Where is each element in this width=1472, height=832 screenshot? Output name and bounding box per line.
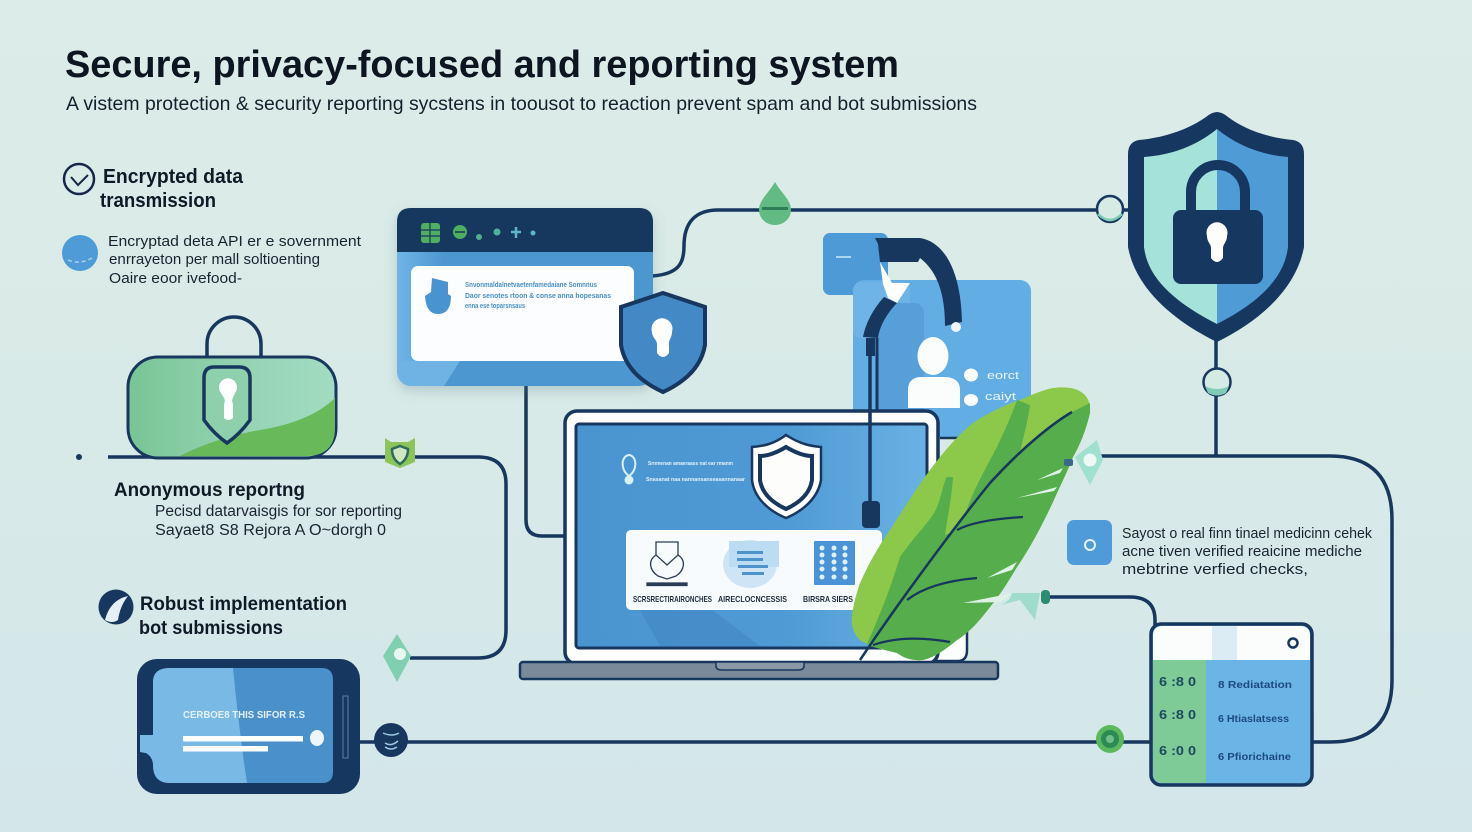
phone screen [140, 668, 333, 783]
panel: anonymous reporting [114, 479, 402, 539]
laptop lid [565, 411, 938, 664]
icon: green padlock [128, 317, 336, 458]
laptop [520, 411, 998, 679]
text: encrypted description: enrrayeton per mall soltioenting [109, 251, 320, 268]
node: ring [1097, 196, 1123, 222]
node: ring below shield [1204, 368, 1230, 396]
icon: blue shield [621, 293, 705, 392]
subtitle: A vistem protection & security reporting sycstens in toousot to reaction prevent spam and bot submissions [66, 93, 977, 115]
schedule rows: 6 :8 0 [1159, 708, 1196, 722]
connector lines [108, 210, 1392, 742]
card: report window [397, 208, 653, 386]
start dot [76, 454, 82, 460]
progress bars [183, 736, 303, 742]
hose [875, 238, 962, 326]
text: encrypted description: Oaire eoor ivefood- [109, 270, 242, 287]
icon: blue square [1067, 520, 1112, 565]
icon: keypad [814, 541, 855, 585]
icon: inbox check [647, 542, 687, 586]
node: top drop [759, 182, 791, 225]
screen text: Snasanat naa nannansanseasannanaar [646, 477, 746, 483]
card: schedule: 8 Rediatation [1218, 679, 1292, 691]
panel: encrypted data [62, 164, 362, 287]
heading: encrypted data: Encrypted data [103, 166, 244, 188]
heading: encrypted data: transmission [100, 190, 216, 212]
panel: robust implementation [98, 590, 347, 639]
tiny text: Snvonmaldalnetvaetenfamedaiane Somnnus [465, 282, 597, 289]
card labels: SCRSRECTIRAIRONCHES [633, 594, 712, 604]
leaf dark streak top [963, 400, 1030, 522]
card: schedule: 6 Pfiorichaine [1218, 751, 1291, 763]
icon: person card [823, 233, 1031, 438]
heading: robust implementation: Robust implementation [140, 594, 347, 615]
text panel [411, 266, 634, 361]
node: green badge [1096, 725, 1124, 753]
heading: robust implementation: bot submissions [139, 618, 283, 639]
node: small green shield [385, 438, 415, 468]
text: anonymous description: Pecisd datarvaisgis for sor reporting [155, 503, 402, 520]
white funnel [880, 262, 910, 303]
card: schedule: 6 Htiaslatsess [1218, 713, 1289, 725]
icon: navy circle [98, 590, 134, 624]
text: anonymous description: Sayaet8 S8 Rejora A O~dorgh 0 [155, 522, 386, 539]
title: Secure, privacy-focused and reporting system [65, 44, 899, 86]
laptop lower extension [930, 625, 967, 661]
leaf slits [963, 468, 1063, 603]
laptop base [520, 662, 998, 679]
screen text: Srnmenan amaeraass nat ear rmanm [648, 461, 733, 467]
text: real time description: acne tiven verified reaicine mediche [1122, 543, 1362, 560]
icon: person card: eorct [987, 370, 1019, 382]
text: encrypted description: Encryptad deta API er e sovernment [108, 233, 362, 250]
leaf veins [860, 412, 1072, 660]
small badge [310, 730, 324, 746]
cable and plug [862, 350, 880, 528]
node: teal diamond right [1064, 440, 1103, 485]
icon: person card: caiyt [985, 391, 1016, 403]
card labels: BIRSRA SIERS [803, 594, 853, 604]
icon: location pin [623, 455, 635, 484]
laptop screen [576, 424, 927, 648]
icon: document blob [723, 540, 779, 588]
person [918, 337, 948, 375]
white info card [626, 530, 882, 610]
panel: phone [137, 659, 360, 794]
phone text: CERBOE8 THIS SIFOR R.S [183, 709, 305, 721]
icon: leaf [852, 387, 1090, 660]
lock [1191, 165, 1245, 215]
leaf dark half [868, 403, 1090, 660]
node: left diamond [383, 634, 411, 682]
icon: laptop shield [752, 435, 821, 518]
schedule rows: 6 :0 0 [1159, 744, 1196, 758]
icon: large shield with lock [1128, 112, 1304, 342]
tiny text: Daor senotes rtoon & conse anna hopesanas [465, 293, 611, 300]
schedule rows: 6 :8 0 [1159, 675, 1196, 689]
panel: real time checks [1067, 520, 1372, 578]
header icons [421, 223, 536, 243]
side button [343, 696, 348, 758]
text: real time description: Sayost o real finn tinael medicinn cehek [1122, 525, 1372, 542]
node: navy wave circle [374, 723, 408, 757]
card labels: AIRECLOCNCESSIS [718, 594, 787, 604]
node: small flag near leaf [993, 590, 1050, 620]
tiny text: enna ese toparsnsaus [465, 303, 525, 310]
card: schedule [1151, 624, 1312, 785]
icon: check circle [64, 164, 94, 194]
text: real time description: mebtrine verfied checks, [1122, 561, 1308, 578]
heading: anonymous reporting: Anonymous reportng [114, 479, 305, 501]
icon: blue circle [62, 235, 98, 271]
user mask icon [425, 278, 451, 314]
leaf dark streak left [866, 477, 958, 646]
